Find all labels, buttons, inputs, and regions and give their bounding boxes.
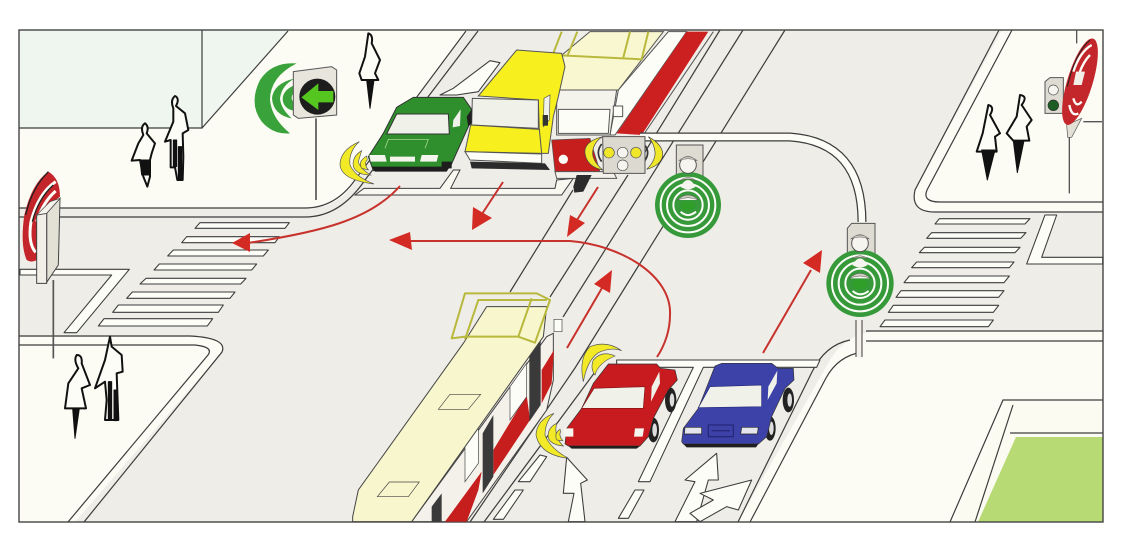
arrow: tram straight up xyxy=(567,270,612,348)
road markings: lower approach xyxy=(493,360,820,522)
tram signal with yellow crescents xyxy=(585,137,663,173)
road arrow: straight and right xyxy=(675,453,718,522)
crosswalk: right xyxy=(880,215,1103,327)
car: red xyxy=(564,364,677,449)
tram red stripes xyxy=(445,472,482,522)
sidewalk: bottom left block xyxy=(19,337,222,522)
crosswalk: left xyxy=(98,223,289,326)
pedestrians: lower left xyxy=(65,337,123,438)
tram: top background xyxy=(552,32,713,193)
road arrow: straight and left xyxy=(563,457,587,522)
car: blue xyxy=(682,363,794,447)
sidewalk: top left block xyxy=(19,30,468,208)
body xyxy=(565,364,677,446)
tram pantograph xyxy=(553,32,648,59)
pedestrians: top right xyxy=(977,95,1032,180)
tram side with red stripe xyxy=(610,32,687,135)
arrow: red car long left turn xyxy=(389,232,670,357)
yellow crescents by the red car xyxy=(536,344,622,458)
body xyxy=(682,363,794,444)
lane markings: upper approach xyxy=(355,61,573,195)
tram side xyxy=(412,333,553,522)
tram pantograph xyxy=(452,293,550,343)
tram red lower front xyxy=(552,138,600,172)
wheels xyxy=(665,388,676,412)
pedestrians: upper left xyxy=(132,96,188,187)
arrow: green car turning left xyxy=(232,186,400,252)
arrow: van straight xyxy=(472,182,503,230)
car: green xyxy=(368,97,472,172)
arrow: blue car straight xyxy=(763,250,822,353)
traffic wire and pole xyxy=(640,137,862,357)
stop line marking: left xyxy=(20,269,129,358)
tram roof xyxy=(557,32,663,90)
arrow: tram straight down xyxy=(567,187,598,237)
sidewalk: bottom right block xyxy=(738,331,1103,522)
car: yellow van xyxy=(465,50,565,170)
sidewalk: top right block xyxy=(914,30,1103,212)
yellow crescents by the green car xyxy=(340,142,374,184)
traffic light with green rings: right xyxy=(826,223,894,317)
tram roof xyxy=(353,307,547,522)
tram windows and doors xyxy=(432,340,541,522)
red curved lines and arrows xyxy=(232,182,822,357)
building: bottom right green lawn xyxy=(950,400,1103,522)
green arrow sign with green crescents xyxy=(255,63,337,200)
building: top left xyxy=(19,30,288,128)
traffic light with green rings: center xyxy=(655,145,721,238)
pedestrian: top center xyxy=(359,33,380,108)
tram front xyxy=(557,90,617,135)
top right signal and sign with red rings xyxy=(1045,30,1105,193)
tram: foreground xyxy=(353,293,562,522)
left sign with red rings xyxy=(23,172,60,283)
wheels xyxy=(783,388,794,412)
